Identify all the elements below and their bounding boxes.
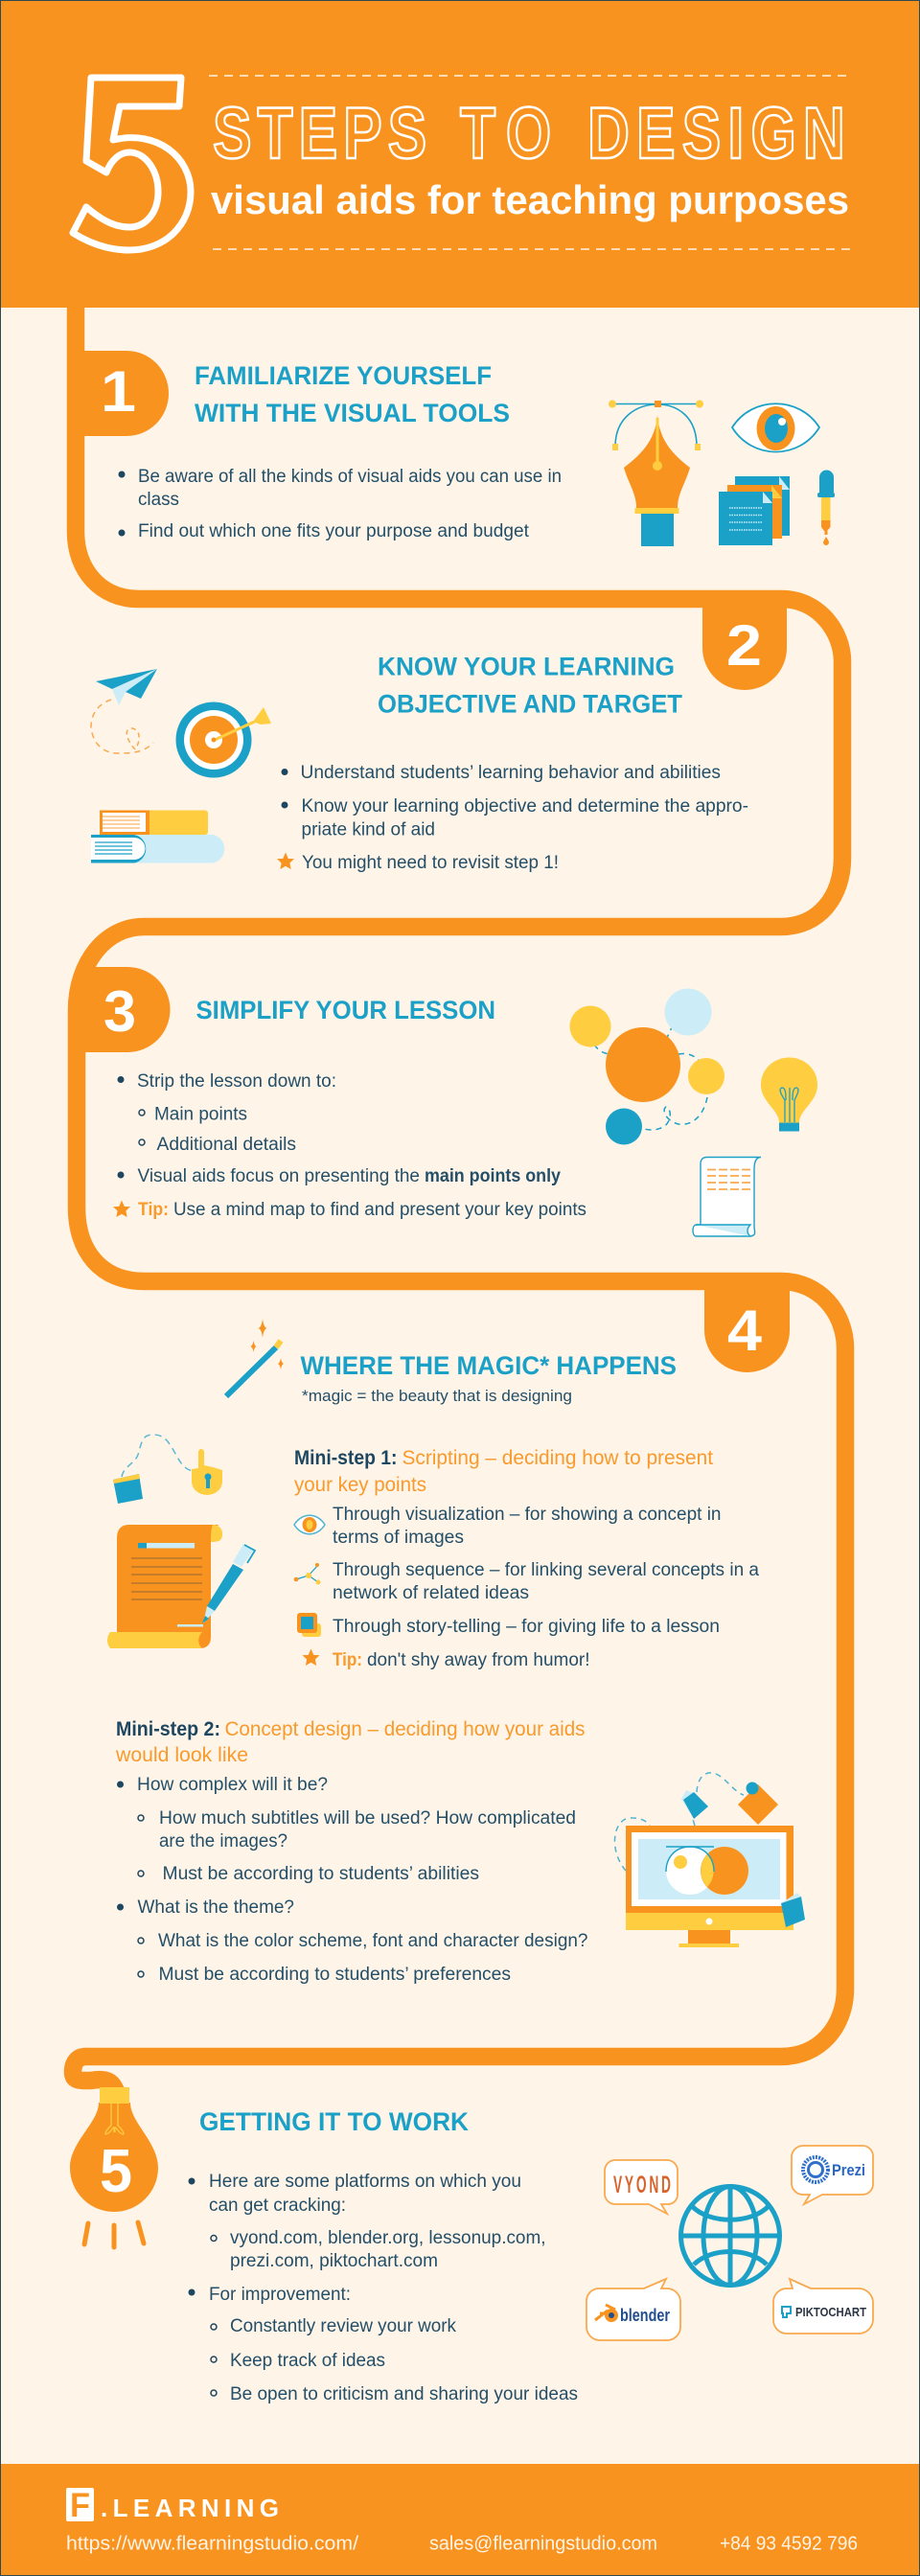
number tab 3: 3 — [104, 979, 136, 1044]
panel: step 2 — [91, 602, 787, 873]
bullet list 5: For improvement: — [209, 2285, 351, 2305]
bullet list 3: main points only — [425, 1166, 561, 1186]
title: steps to design — [213, 93, 845, 174]
icon: books — [91, 811, 224, 862]
bullet list 1: Be aware of all the kinds of visual aids you can use in — [138, 467, 562, 487]
heading 2 — [378, 652, 682, 719]
mini-step 2 text: How complex will it be? — [137, 1775, 328, 1795]
panel: step 1 — [77, 351, 835, 546]
icon: paper plane — [91, 669, 157, 753]
bullet list 2 — [277, 763, 748, 873]
mini-step 1 text: Scripting – deciding how to present — [402, 1447, 713, 1469]
logo: F — [70, 2487, 90, 2524]
bullet list 2: priate kind of aid — [301, 820, 435, 840]
number tab 4: 4 — [727, 1299, 763, 1363]
mini-step 2 text: What is the color scheme, font and character design? — [158, 1931, 588, 1951]
small icon: network — [294, 1563, 320, 1585]
heading 4: WHERE THE MAGIC* HAPPENS — [301, 1351, 677, 1380]
mini-step 2 text: Mini-step 2: — [116, 1718, 220, 1740]
heading 2: OBJECTIVE AND TARGET — [378, 690, 682, 719]
heading 4 — [301, 1351, 677, 1405]
title: steps to design: TO — [460, 93, 551, 174]
icon: eye — [732, 403, 819, 452]
header banner — [0, 0, 920, 308]
small icon: story chat — [297, 1613, 321, 1637]
bullet list 5: prezi.com, piktochart.com — [230, 2251, 438, 2271]
heading 1: FAMILIARIZE YOURSELF — [195, 361, 492, 390]
bullet list 5 — [188, 2172, 578, 2404]
mini-step 2 text: What is the theme? — [138, 1898, 294, 1918]
icon: number 5 bulb: 5 — [100, 2136, 132, 2205]
bubble: piktochart: PIKTOCHART — [795, 2305, 866, 2319]
tip star — [303, 1648, 320, 1666]
mini-step 1 text: Mini-step 1: — [294, 1447, 397, 1469]
heading 4: *magic = the beauty that is designing — [302, 1387, 572, 1405]
bubble: prezi — [792, 2146, 873, 2204]
bullet list 5: Constantly review your work — [230, 2316, 456, 2336]
bullet list 2: Know your learning objective and determine the appro- — [301, 796, 748, 816]
panel: step 5 — [70, 2087, 873, 2404]
icon: orange scroll and pen — [107, 1525, 255, 1648]
mini-step 2 text — [115, 1718, 587, 1985]
bullet list 3 — [113, 1071, 586, 1220]
email: sales@flearningstudio.com — [429, 2534, 657, 2555]
heading 2: KNOW YOUR LEARNING — [378, 652, 675, 680]
bubble: blender: blender — [620, 2306, 670, 2325]
number tab 4 — [704, 1284, 790, 1372]
panel: step 3 — [77, 967, 817, 1236]
panel: step 4 — [107, 1284, 805, 1985]
mini-step 1 text: your key points — [294, 1474, 426, 1496]
bubble: prezi: Prezi — [832, 2161, 865, 2179]
bullet list 5: Be open to criticism and sharing your ideas — [230, 2384, 578, 2404]
icon: pen nib with bezier — [609, 401, 703, 546]
icon: magic wand — [226, 1319, 284, 1396]
winding path — [73, 302, 845, 2094]
bubble: blender — [586, 2279, 680, 2340]
bullet list 5: Here are some platforms on which you — [209, 2172, 521, 2192]
heading 5: GETTING IT TO WORK — [199, 2107, 469, 2136]
small icon: eye — [294, 1515, 325, 1534]
bubble: vyond — [605, 2160, 678, 2214]
bullet list 3: Tip: — [138, 1200, 169, 1220]
mini-step 1 text: terms of images — [333, 1528, 464, 1548]
number tab 3 — [77, 967, 171, 1052]
mini-step 1 text — [294, 1447, 759, 1670]
heading 3: SIMPLIFY YOUR LESSON — [196, 996, 495, 1024]
bubble: piktochart — [773, 2279, 873, 2334]
mini-step 1 text: Through story-telling – for giving life to a lesson — [333, 1617, 720, 1637]
bullet list 3: Use a mind map to find and present your key points — [173, 1200, 586, 1220]
icon: light bulb — [761, 1058, 817, 1131]
bubble: vyond: VYOND — [613, 2173, 671, 2198]
mini-step 2 text: How much subtitles will be used? How complicated — [159, 1808, 576, 1828]
mini-step 2 text: Must be according to students’ preferences — [159, 1965, 511, 1985]
phone: +84 93 4592 796 — [720, 2534, 858, 2555]
logo — [66, 2487, 279, 2524]
subtitle: visual aids for teaching purposes — [211, 177, 849, 222]
title: steps to design: DESIGN — [587, 93, 845, 174]
mini-step 1 text: Through visualization – for showing a concept in — [333, 1505, 721, 1525]
icon: globe — [680, 2186, 780, 2286]
website: https://www.flearningstudio.com/ — [66, 2534, 358, 2555]
number tab 2: 2 — [726, 613, 762, 678]
number tab 1: 1 — [101, 359, 136, 424]
heading 1: WITH THE VISUAL TOOLS — [195, 399, 510, 427]
mini-step 1 text: don't shy away from humor! — [367, 1650, 590, 1670]
big number 5 — [73, 78, 191, 250]
icon: target with arrow — [176, 702, 271, 778]
bullet list 1: Find out which one fits your purpose and budget — [138, 521, 530, 541]
bullet list 2: You might need to revisit step 1! — [302, 853, 559, 873]
bullet list 3: Additional details — [157, 1135, 296, 1155]
mini-step 1 text: network of related ideas — [333, 1583, 529, 1603]
bullet list 3: Main points — [154, 1104, 247, 1125]
heading 1 — [195, 361, 510, 427]
mini-step 2 text: are the images? — [159, 1831, 288, 1852]
mini-step 1 text: Tip: — [333, 1650, 362, 1670]
icon: monitor with shapes — [614, 1773, 805, 1947]
mini-step 2 text: Must be according to students’ abilities — [163, 1864, 479, 1884]
number tab 2 — [702, 602, 787, 690]
bullet list 5: Keep track of ideas — [230, 2351, 385, 2371]
icon: dropper — [817, 470, 835, 545]
icon: number 5 bulb — [70, 2087, 158, 2247]
icon: mind map circles — [569, 989, 724, 1144]
bullet list 1 — [119, 467, 562, 541]
mini-step 2 text: Concept design – deciding how your aids — [224, 1718, 585, 1740]
bullet list 5: vyond.com, blender.org, lessonup.com, — [230, 2228, 546, 2248]
mini-step 2 text: would look like — [115, 1744, 248, 1766]
bullet list 3: Visual aids focus on presenting the — [138, 1166, 420, 1186]
bullet list 5: can get cracking: — [209, 2196, 346, 2216]
mini-step 1 text: Through sequence – for linking several concepts in a — [333, 1560, 759, 1580]
number tab 1 — [77, 351, 169, 436]
icon: card and hand — [113, 1435, 222, 1504]
logo: .LEARNING — [101, 2494, 279, 2522]
bullet list 3: Strip the lesson down to: — [137, 1071, 336, 1092]
icon: documents — [719, 476, 790, 545]
bullet list 2: Understand students’ learning behavior and abilities — [301, 763, 721, 783]
icon: paper scroll — [693, 1158, 761, 1236]
footer band — [0, 2464, 920, 2576]
title: steps to design: STEPS — [213, 93, 426, 174]
bullet list 1: class — [138, 490, 179, 510]
